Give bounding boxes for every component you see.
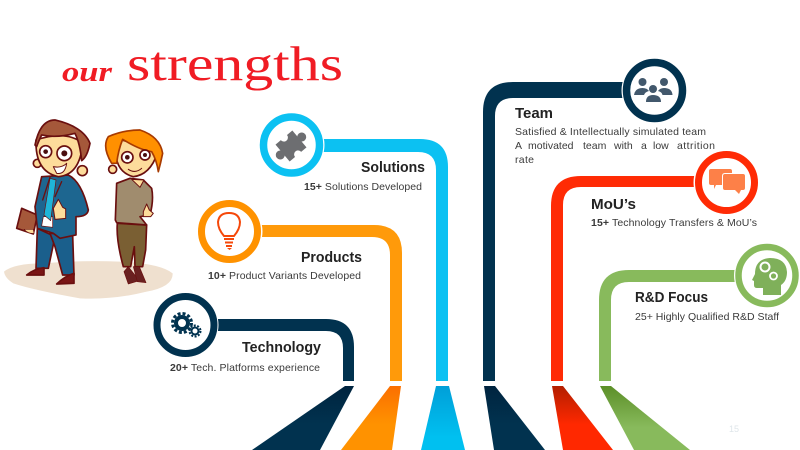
- text: team detail: team: [583, 140, 607, 152]
- heading: technology: Technology: [242, 339, 322, 356]
- woman: [106, 130, 163, 284]
- title: [62, 36, 343, 91]
- title: our: [62, 56, 113, 88]
- icon: puzzle piece: [258, 112, 324, 178]
- heading: products: Products: [301, 249, 362, 266]
- panel: products: [196, 198, 402, 450]
- icon: gears: [152, 292, 218, 358]
- panel: mou: [551, 150, 760, 450]
- man: [17, 120, 90, 284]
- icon: chat bubbles: [694, 150, 760, 216]
- connector: r&d: [599, 270, 742, 381]
- text: team detail: Satisfied & Intellectually simulated team: [515, 126, 706, 138]
- heading: solutions: Solutions: [361, 159, 425, 176]
- panel: solutions: [258, 112, 465, 450]
- text: team detail: low: [653, 140, 669, 152]
- illustration: business man and woman: [4, 120, 173, 299]
- text: technology detail: 20+ Tech. Platforms experience: [170, 362, 320, 374]
- base wedge: mou: [552, 386, 613, 450]
- ground shadow: [4, 261, 173, 299]
- text: team detail: [515, 126, 715, 166]
- panel: r&d focus: [599, 242, 800, 450]
- connector: mou: [551, 176, 700, 381]
- page number: 15: [729, 424, 739, 434]
- text: products detail: 10+ Product Variants Developed: [208, 270, 361, 282]
- text: mou detail: 15+ Technology Transfers & MoU’s: [591, 217, 757, 229]
- text: r&d detail: 25+ Highly Qualified R&D Staff: [635, 311, 779, 323]
- base wedge: r&d: [600, 386, 690, 450]
- icon: people: [622, 58, 688, 124]
- panel: team: [483, 58, 715, 450]
- base wedge: technology: [252, 386, 354, 450]
- title: strengths: [127, 36, 343, 91]
- heading: mou: MoU’s: [591, 196, 636, 213]
- connector: team: [483, 82, 630, 381]
- text: team detail: A: [515, 140, 522, 152]
- heading: team: Team: [515, 105, 553, 122]
- connector: solutions: [318, 139, 448, 381]
- text: team detail: a: [641, 140, 647, 152]
- base wedge: products: [341, 386, 401, 450]
- connector: technology: [210, 319, 354, 381]
- base wedge: solutions: [421, 386, 465, 450]
- heading: r&d: R&D Focus: [635, 289, 708, 306]
- panel: technology: [152, 292, 354, 450]
- icon: light bulb: [196, 198, 262, 264]
- text: team detail: motivated: [528, 140, 574, 152]
- text: team detail: attrition: [677, 140, 715, 152]
- base wedge: team: [484, 386, 545, 450]
- text: team detail: rate: [515, 154, 534, 166]
- icon: head with gears: [734, 242, 800, 308]
- text: solutions detail: 15+ Solutions Developed: [304, 181, 422, 193]
- text: team detail: with: [613, 140, 633, 152]
- connector: products: [255, 225, 402, 381]
